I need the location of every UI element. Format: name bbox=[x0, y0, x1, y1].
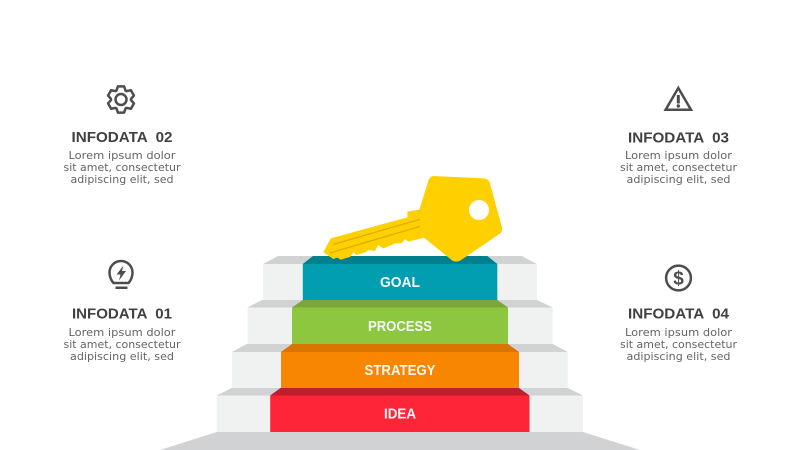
panel: infodata 01: sit amet, consectetur bbox=[64, 338, 181, 351]
step: goal: GOAL bbox=[380, 275, 420, 291]
panel: infodata 04: Lorem ipsum dolor bbox=[625, 326, 732, 339]
panel: infodata 04: adipiscing elit, sed bbox=[626, 350, 730, 363]
panel: infodata 02: INFODATA 02 bbox=[72, 129, 172, 146]
panel: infodata 04 bbox=[620, 306, 737, 363]
panel: infodata 02: sit amet, consectetur bbox=[64, 161, 181, 174]
panel: infodata 01: INFODATA 01 bbox=[72, 306, 172, 322]
panel: infodata 04: sit amet, consectetur bbox=[620, 338, 737, 351]
panel: infodata 03: adipiscing elit, sed bbox=[626, 173, 730, 186]
panel: infodata 01 bbox=[64, 306, 181, 363]
panel: infodata 03: INFODATA 03 bbox=[628, 130, 729, 146]
step: idea: IDEA bbox=[384, 406, 416, 422]
step: process bbox=[292, 300, 508, 344]
floor bbox=[160, 432, 640, 450]
panel: infodata 04: INFODATA 04 bbox=[628, 306, 730, 322]
icon: warning triangle bbox=[666, 88, 691, 110]
panel: infodata 03 bbox=[620, 130, 737, 186]
step: idea bbox=[270, 388, 530, 432]
icon: dollar coin: $ bbox=[673, 268, 684, 290]
icon: light bulb bbox=[110, 261, 132, 289]
stairs: white steps bbox=[217, 256, 583, 432]
step: strategy bbox=[281, 344, 519, 388]
icon: dollar coin bbox=[666, 266, 691, 290]
panel: infodata 01: Lorem ipsum dolor bbox=[68, 326, 176, 339]
step: process: PROCESS bbox=[368, 319, 432, 335]
panel: infodata 01: adipiscing elit, sed bbox=[70, 350, 174, 363]
panel: infodata 03: sit amet, consectetur bbox=[620, 161, 737, 174]
icon: gear bbox=[108, 86, 134, 113]
step: goal bbox=[303, 256, 497, 300]
panel: infodata 02 bbox=[64, 129, 181, 186]
panel: infodata 02: adipiscing elit, sed bbox=[70, 173, 174, 186]
panel: infodata 03: Lorem ipsum dolor bbox=[625, 149, 732, 162]
panel: infodata 02: Lorem ipsum dolor bbox=[68, 149, 176, 162]
icon: key bbox=[323, 176, 502, 262]
step: strategy: STRATEGY bbox=[364, 363, 436, 379]
